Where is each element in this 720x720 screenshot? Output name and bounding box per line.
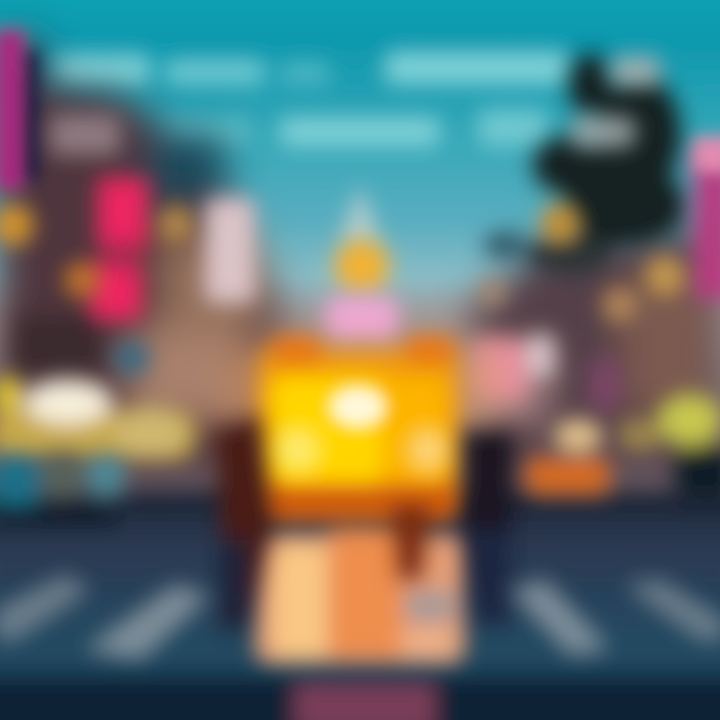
red sign — [90, 178, 148, 320]
left figure — [212, 415, 272, 625]
pink base — [326, 297, 398, 341]
pink storefront — [472, 335, 620, 410]
dark storefront — [15, 315, 100, 375]
warm lights — [478, 204, 685, 322]
building mass — [0, 40, 285, 470]
pale spire — [340, 185, 380, 245]
palm tree — [483, 53, 687, 275]
road — [0, 490, 720, 720]
central tower — [326, 185, 398, 341]
left parked cars — [0, 452, 124, 521]
warm lights — [0, 205, 194, 297]
bottom dark band — [0, 678, 720, 720]
figures — [212, 415, 516, 630]
pale sign — [50, 115, 120, 155]
right street-level lights and cars — [525, 394, 720, 500]
pale title patches over tree — [572, 58, 660, 146]
blurred title lines — [55, 52, 570, 146]
yellow panel — [272, 376, 448, 480]
orange roof lights — [272, 336, 455, 362]
right headlight — [408, 428, 448, 472]
building mass — [470, 230, 720, 470]
left buildings — [0, 30, 285, 470]
lower orange band — [262, 484, 457, 520]
pink side sign — [694, 150, 720, 300]
orange body — [258, 350, 458, 510]
crosswalk stripes — [0, 575, 720, 660]
left street-level lights — [0, 377, 195, 460]
white sign — [205, 198, 255, 303]
left headlight — [276, 428, 320, 472]
magenta strip sign — [0, 30, 24, 190]
white light — [330, 387, 386, 427]
yellow dome — [334, 239, 390, 293]
sky background — [0, 0, 720, 520]
blue sign — [114, 340, 150, 376]
glowing central vehicle — [225, 336, 495, 520]
right figure — [462, 430, 516, 625]
centre figure — [392, 505, 430, 580]
glow halo — [225, 345, 495, 435]
dark edge strip — [26, 50, 40, 180]
right buildings — [470, 53, 720, 470]
road reflection — [256, 528, 464, 663]
